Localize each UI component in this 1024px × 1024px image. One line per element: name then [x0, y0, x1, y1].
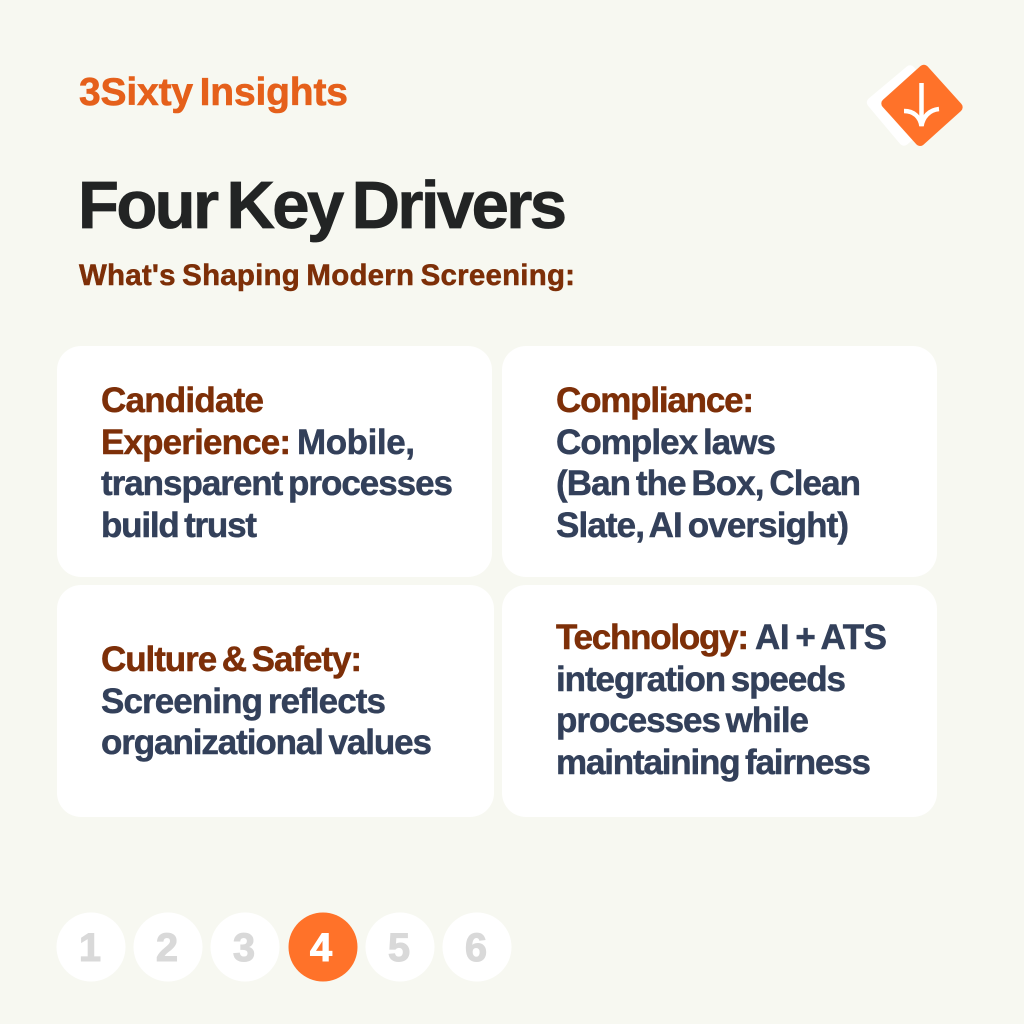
body: mobile: Mobile, — [297, 423, 415, 462]
body: complex laws: Complex laws — [556, 423, 776, 462]
body: slate: Slate, AI oversight) — [556, 506, 849, 545]
page 3: 3 — [233, 926, 255, 970]
body: integration speeds: integration speeds — [556, 660, 846, 699]
page 5: 5 — [388, 926, 410, 970]
page 2: 2 — [156, 926, 178, 970]
subtitle: What's Shaping Modern Screening: — [79, 259, 575, 292]
pagination — [56, 912, 512, 982]
panel: culture and safety — [57, 585, 494, 817]
page 5 — [366, 912, 434, 982]
heading: technology: Technology: — [556, 618, 749, 657]
body: build trust: build trust — [101, 506, 257, 545]
heading: experience: Experience: — [101, 423, 291, 462]
body: maintaining fairness: maintaining fairness — [556, 743, 871, 782]
icon: diamond with down arrow — [865, 63, 965, 148]
brand name: 3Sixty Insights — [79, 71, 348, 114]
body: transparent processes: transparent processes — [101, 464, 453, 503]
panel: candidate experience — [57, 346, 492, 577]
page 4 active: 4 — [310, 926, 333, 970]
page 1: 1 — [79, 926, 101, 970]
page 3 — [210, 912, 280, 982]
heading: culture: Culture & Safety: — [101, 640, 362, 679]
page 6 — [442, 912, 512, 982]
body: processes while: processes while — [556, 701, 809, 740]
body: screening reflects: Screening reflects — [101, 682, 386, 721]
panel: technology — [502, 585, 937, 817]
body: organizational values: organizational values — [101, 723, 432, 762]
body: ai ats: AI + ATS — [755, 618, 887, 657]
page 2 — [134, 912, 202, 982]
body: ban the box: (Ban the Box, Clean — [556, 464, 861, 503]
heading: candidate: Candidate — [101, 381, 264, 420]
page 6: 6 — [465, 926, 487, 970]
page 1 — [56, 912, 126, 982]
title: Four Key Drivers — [78, 168, 567, 243]
heading: compliance: Compliance: — [556, 381, 754, 420]
page 4 active — [288, 912, 358, 982]
panel: compliance — [502, 346, 937, 577]
